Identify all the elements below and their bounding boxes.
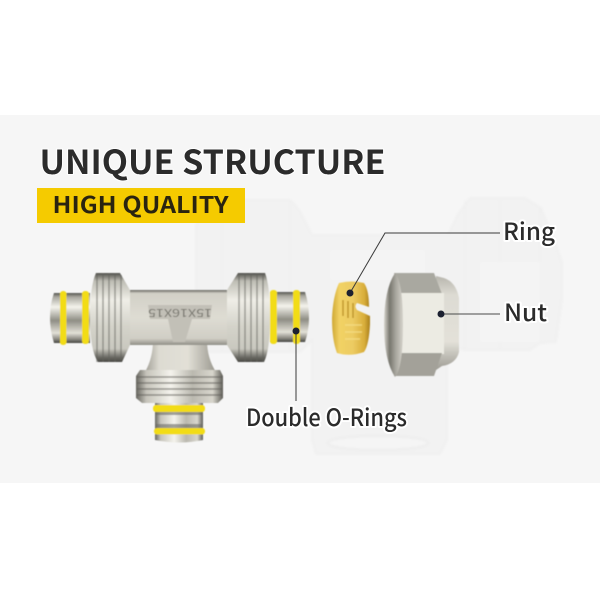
threaded rim	[384, 273, 403, 377]
title: UNIQUE STRUCTURE	[40, 136, 386, 184]
embossed marking: 15X16X15	[148, 305, 212, 321]
left pipe end	[50, 291, 90, 345]
right threaded collar	[227, 273, 270, 362]
lower stem	[145, 340, 216, 372]
right pipe end	[270, 290, 309, 344]
callout: nut: Nut	[504, 293, 548, 328]
body	[128, 290, 230, 345]
embossed marking	[148, 305, 212, 342]
background panel	[0, 115, 600, 483]
bottom pipe end	[153, 403, 205, 442]
brass ring	[332, 282, 370, 355]
tee fitting with double o-rings	[50, 273, 309, 442]
callout: ring	[346, 212, 555, 296]
hex bottom face	[394, 353, 442, 376]
hex middle face	[400, 293, 444, 354]
left threaded collar	[90, 273, 130, 362]
ghosted tee fitting in background	[196, 198, 562, 454]
end cap	[436, 276, 459, 370]
callout: nut	[438, 293, 548, 328]
badge: high quality: HIGH QUALITY	[52, 186, 229, 220]
callout: double o-rings: Double O-Rings	[246, 398, 407, 433]
callout: double o-rings	[246, 328, 407, 433]
hex top face	[394, 273, 442, 294]
compression nut	[384, 273, 459, 377]
lower threaded collar	[136, 370, 223, 403]
callout: ring: Ring	[503, 212, 555, 247]
